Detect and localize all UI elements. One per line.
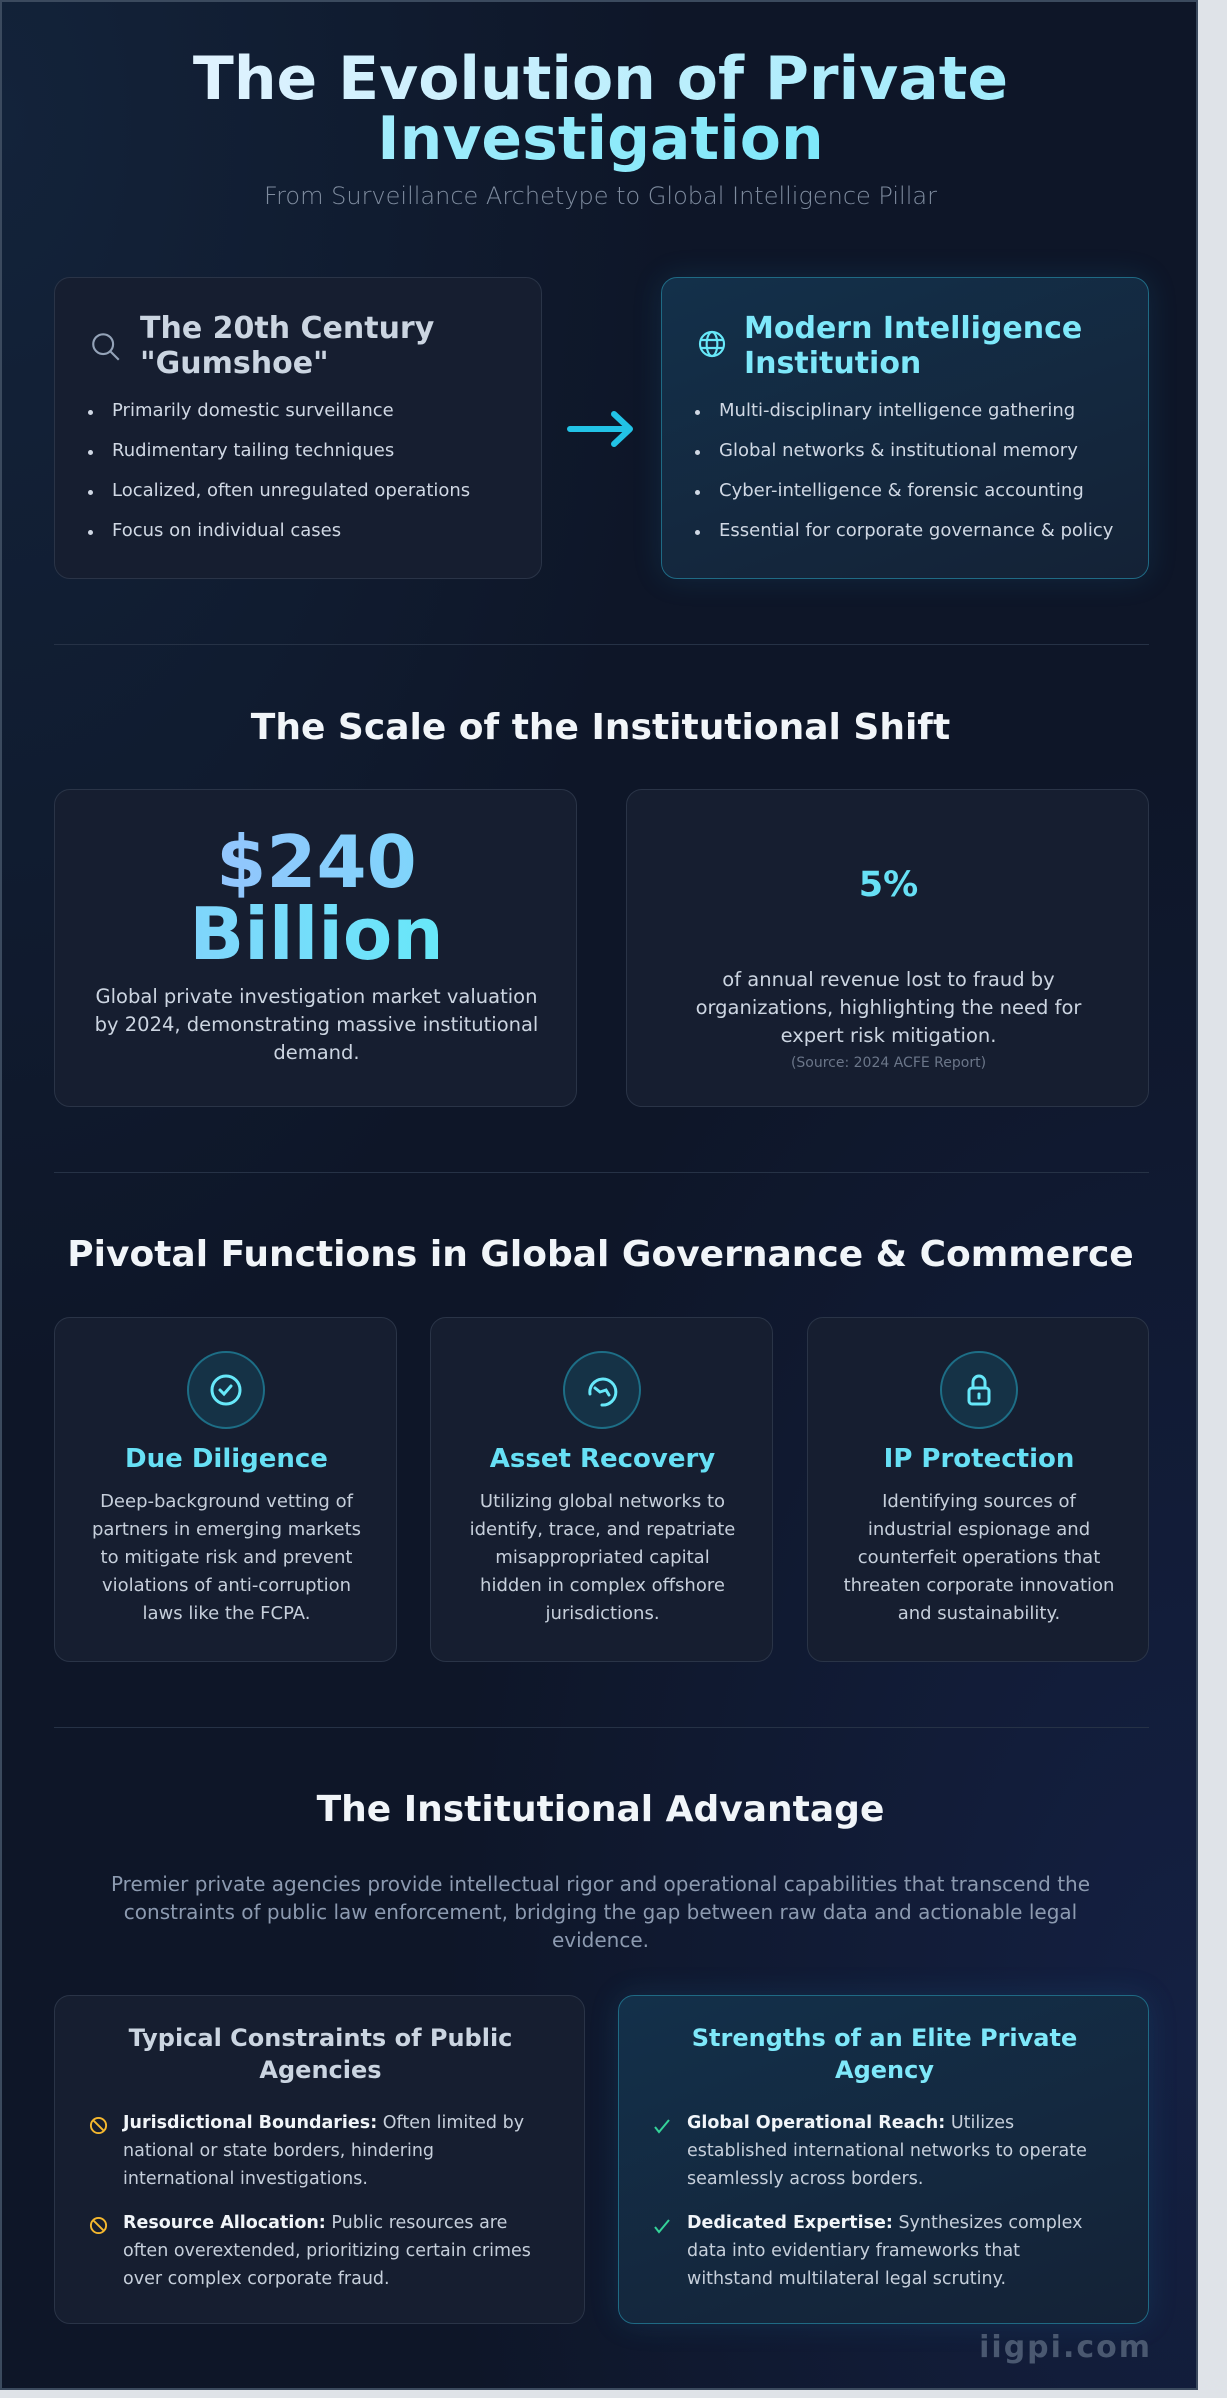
heading: Strengths of an Elite Private <box>692 2024 1077 2052</box>
panel: $240 billion stat <box>54 789 577 1107</box>
icon: recovery <box>563 1351 641 1429</box>
panel: modern intelligence <box>661 277 1149 579</box>
icon: lock <box>940 1351 1018 1429</box>
stat description: Global private investigation market valuation by 2024, demonstrating massive institutional demand. <box>95 985 538 1064</box>
heading: Agencies <box>259 2056 382 2084</box>
heading: Modern Intelligence <box>744 311 1082 346</box>
panel: ip protection <box>807 1317 1149 1662</box>
panel: 20th century gumshoe: Focus on individual cases <box>112 520 341 541</box>
bullet list <box>88 400 470 541</box>
panel: modern intelligence: Essential for corporate governance & policy <box>719 520 1113 541</box>
arrow <box>567 411 633 447</box>
source: (Source: 2024 ACFE Report) <box>791 1055 986 1071</box>
heading: pivotal functions: Pivotal Functions in Global Governance & Commerce <box>67 1234 1134 1275</box>
description: Deep-background vetting of partners in emerging markets to mitigate risk and prevent violations of anti-corruption laws like the FCPA. <box>92 1491 361 1624</box>
stat value: Billion <box>189 892 444 976</box>
icon: check circle <box>187 1351 265 1429</box>
panel: modern intelligence: Global networks & institutional memory <box>719 440 1078 461</box>
heading: Typical Constraints of Public <box>129 2024 512 2052</box>
panel: modern intelligence: Multi-disciplinary intelligence gathering <box>719 400 1075 421</box>
item: jurisdictional: Jurisdictional Boundaries: Often limited by national or state borders, hindering international investigations. <box>123 2113 524 2189</box>
panel: 20th century gumshoe <box>54 277 542 579</box>
title: Asset Recovery <box>490 1444 715 1474</box>
panel: 20th century gumshoe: Rudimentary tailing techniques <box>112 440 394 461</box>
heading <box>140 311 434 381</box>
stat value <box>189 820 444 976</box>
heading: Institution <box>744 346 921 381</box>
item: resource allocation: Resource Allocation: Public resources are often overextended, prioritizing certain crimes over complex corporate fraud. <box>123 2213 531 2289</box>
watermark: iigpi.com <box>979 2330 1152 2365</box>
bullet list <box>695 400 1113 541</box>
title: Due Diligence <box>125 1444 328 1474</box>
title: IP Protection <box>884 1444 1074 1474</box>
intro paragraph: Premier private agencies provide intellectual rigor and operational capabilities that transcend the constraints of public law enforcement, bridging the gap between raw data and actionable legal evidence. <box>111 1872 1090 1952</box>
item: global reach: Global Operational Reach: Utilizes established international networks to operate seamlessly across borders. <box>687 2113 1087 2189</box>
panel: public agency constraints <box>54 1995 585 2324</box>
panel: asset recovery <box>430 1317 773 1662</box>
heading <box>692 2024 1077 2084</box>
item: dedicated expertise: Dedicated Expertise: Synthesizes complex data into evidentiary frameworks that withstand multilateral legal scrutiny. <box>687 2213 1082 2289</box>
title: The Evolution of Private <box>193 44 1008 114</box>
heading: The 20th Century <box>140 311 434 346</box>
heading: institutional advantage: The Institutional Advantage <box>317 1789 884 1830</box>
heading: scale: The Scale of the Institutional Shift <box>251 707 950 748</box>
stat value: $240 <box>216 820 417 904</box>
panel: due diligence <box>54 1317 397 1662</box>
panel: modern intelligence: Cyber-intelligence & forensic accounting <box>719 480 1084 501</box>
panel: 20th century gumshoe: Primarily domestic surveillance <box>112 400 394 421</box>
icon: magnifier <box>92 333 120 360</box>
subtitle: From Surveillance Archetype to Global Intelligence Pillar <box>264 182 937 210</box>
panel: private agency strengths <box>618 1995 1149 2324</box>
title: Investigation <box>377 104 824 174</box>
panel: 20th century gumshoe: Localized, often unregulated operations <box>112 480 470 501</box>
stat value: 5% <box>859 865 918 905</box>
description: Utilizing global networks to identify, trace, and repatriate misappropriated capital hidden in complex offshore jurisdictions. <box>470 1491 735 1624</box>
icon: globe <box>698 330 726 358</box>
heading: "Gumshoe" <box>140 346 329 381</box>
title <box>193 44 1008 174</box>
description: Identifying sources of industrial espionage and counterfeit operations that threaten corporate innovation and sustainability. <box>844 1491 1114 1624</box>
panel: 5% stat <box>626 789 1149 1107</box>
heading: Agency <box>835 2056 934 2084</box>
stat description: of annual revenue lost to fraud by organizations, highlighting the need for expert risk mitigation. <box>696 968 1081 1047</box>
heading <box>128 2024 512 2084</box>
heading <box>744 311 1082 381</box>
